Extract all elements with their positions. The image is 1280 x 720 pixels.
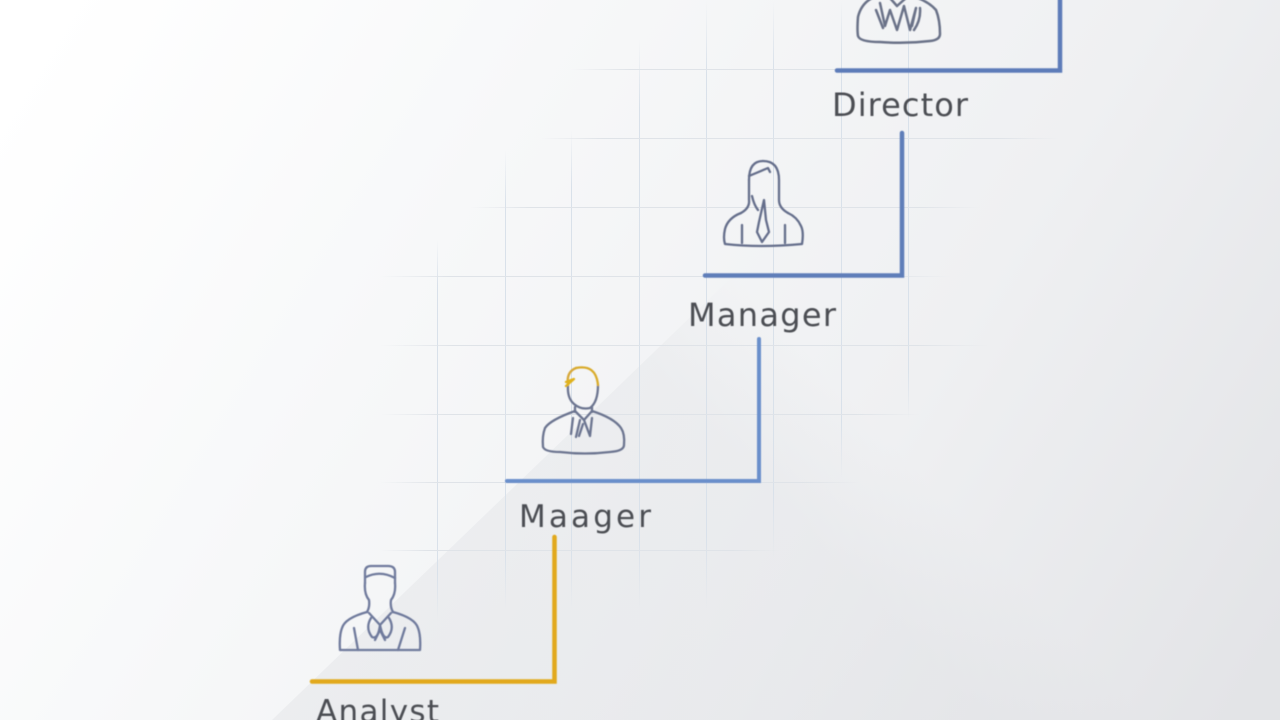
icon: manager person with tie (724, 161, 803, 246)
step line: Director (blue) (837, 0, 1060, 70)
step: Manager (688, 133, 902, 334)
icon: analyst person (340, 566, 420, 650)
step: Analyst (312, 537, 554, 720)
label: Maager: Maager (519, 499, 651, 535)
step: Maager (507, 339, 759, 535)
step: Director (832, 0, 1060, 124)
step line: Manager (blue) (705, 133, 902, 276)
step line: Maager (blue) (507, 339, 759, 481)
icon: manager person with yellow hair (543, 367, 624, 454)
step line: Analyst (yellow) (312, 537, 554, 682)
label: Manager: Manager (688, 296, 837, 334)
label: Director: Director (832, 86, 969, 124)
diagonal shaded band (272, 250, 1280, 720)
icon: director person, cropped at top (858, 0, 940, 43)
